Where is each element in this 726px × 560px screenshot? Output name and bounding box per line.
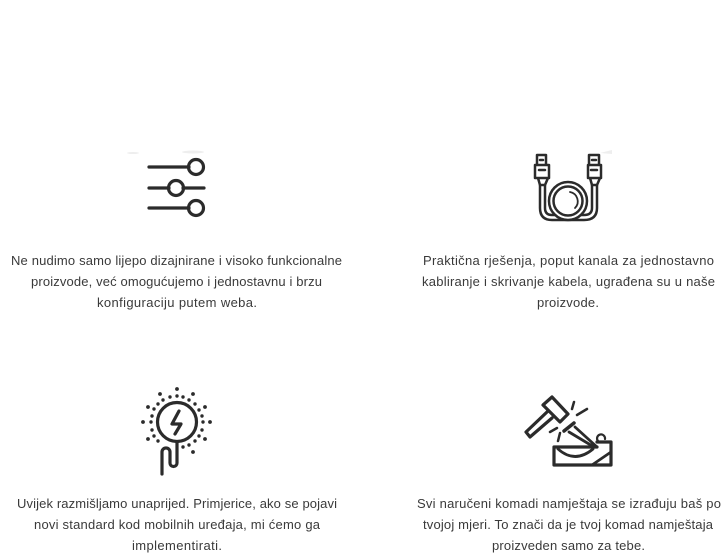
text: cable management [422,253,715,310]
text: future standards [17,496,337,553]
icon: coiled cable [535,155,601,220]
icon: hammer and chisel on wood [526,397,611,465]
text: cable management: Praktična rješenja, poput kanala za jednostavno [423,253,714,268]
text: custom furniture [417,496,721,553]
text: future standards: Uvijek razmišljamo unaprijed. Primjerice, ako se pojavi [17,496,337,511]
text: custom furniture: Svi naručeni komadi namještaja se izrađuju baš po [417,496,721,511]
text: web configuration: proizvode, već omogućujemo i jednostavnu i brzu [31,274,322,289]
panel: cable management [422,155,715,310]
text: custom furniture: tvojoj mjeri. To znači da je tvoj komad namještaja [423,517,714,532]
text: web configuration: Ne nudimo samo lijepo dizajnirane i visoko funkcionalne [11,253,342,268]
icon: sliders [149,160,204,216]
text: cable management: proizvode. [537,295,599,310]
panel: custom furniture [417,397,721,553]
text: custom furniture: proizveden samo za tebe. [492,538,645,553]
text: future standards: implementirati. [132,538,222,553]
text: web configuration: konfiguraciju putem weba. [97,295,257,310]
text: cable management: kabliranje i skrivanje kabela, ugrađena su u naše [422,274,715,289]
panel: future standards [17,387,337,553]
text: web configuration [11,253,342,310]
text: future standards: novi standard kod mobilnih uređaja, mi ćemo ga [34,517,321,532]
panel: web configuration [11,160,342,310]
icon: charging bolt [141,387,212,474]
